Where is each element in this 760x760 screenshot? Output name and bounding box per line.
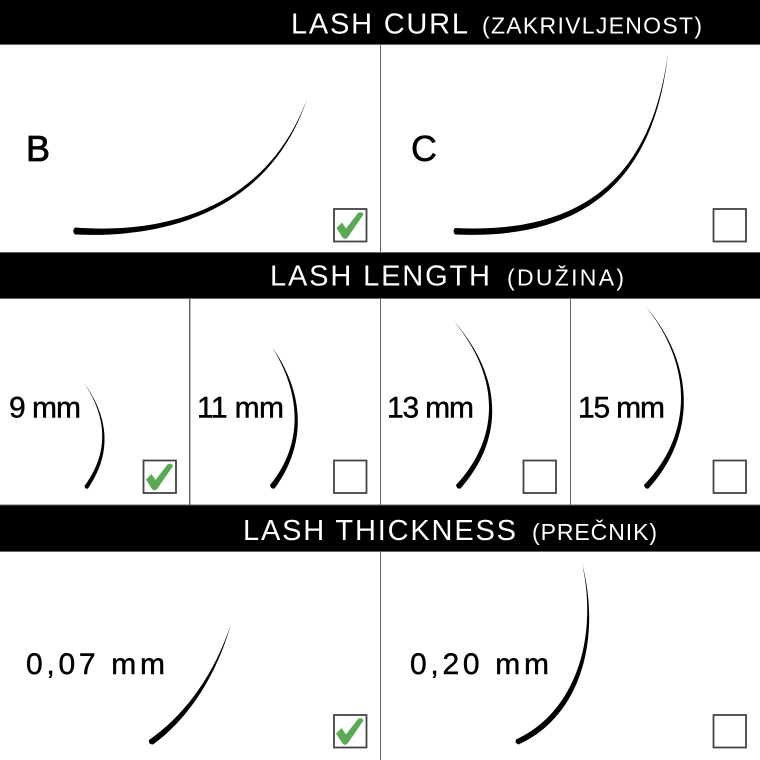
11 mm label: 11 mm <box>197 392 284 425</box>
heading: lash length <box>0 252 760 298</box>
checkbox: 0,07 mm selected <box>334 715 366 748</box>
checkbox: 13 mm empty <box>524 460 556 493</box>
checkbox: B selected <box>334 209 366 242</box>
option C label: C <box>411 128 437 169</box>
0,07 mm label: 0,07 mm <box>26 648 165 681</box>
panel: lash thickness <box>0 505 760 760</box>
heading: lash curl <box>0 0 760 44</box>
9 mm label: 9 mm <box>9 392 81 425</box>
option B label: B <box>26 128 50 169</box>
13 mm label: 13 mm <box>387 392 474 425</box>
0,20 mm lash <box>516 563 589 744</box>
9 mm lash <box>84 383 105 489</box>
11 mm lash <box>270 347 298 489</box>
panel: lash curl <box>0 0 760 252</box>
heading: lash curl: (ZAKRIVLJENOST) <box>482 12 702 38</box>
checkbox: 9 mm selected <box>144 460 176 493</box>
13 mm lash <box>453 320 492 489</box>
B curl lash <box>73 99 307 235</box>
15 mm label: 15 mm <box>578 392 665 425</box>
heading: lash thickness: LASH THICKNESS <box>243 515 516 547</box>
checkbox: C empty <box>714 209 746 242</box>
C curl lash <box>454 53 668 235</box>
heading: lash thickness <box>0 505 760 551</box>
heading: lash length: LASH LENGTH <box>270 261 490 293</box>
checkbox: 15 mm empty <box>714 460 746 493</box>
checkbox: 11 mm empty <box>334 460 366 493</box>
heading: lash curl: LASH CURL <box>291 8 468 40</box>
0,07 mm lash <box>149 624 231 744</box>
0,20 mm label: 0,20 mm <box>410 648 549 681</box>
15 mm lash <box>644 307 684 489</box>
panel: lash length <box>0 252 760 505</box>
heading: lash length: (DUŽINA) <box>507 265 624 291</box>
heading: lash thickness: (PREČNIK) <box>532 518 657 545</box>
checkbox: 0,20 mm empty <box>714 715 746 748</box>
